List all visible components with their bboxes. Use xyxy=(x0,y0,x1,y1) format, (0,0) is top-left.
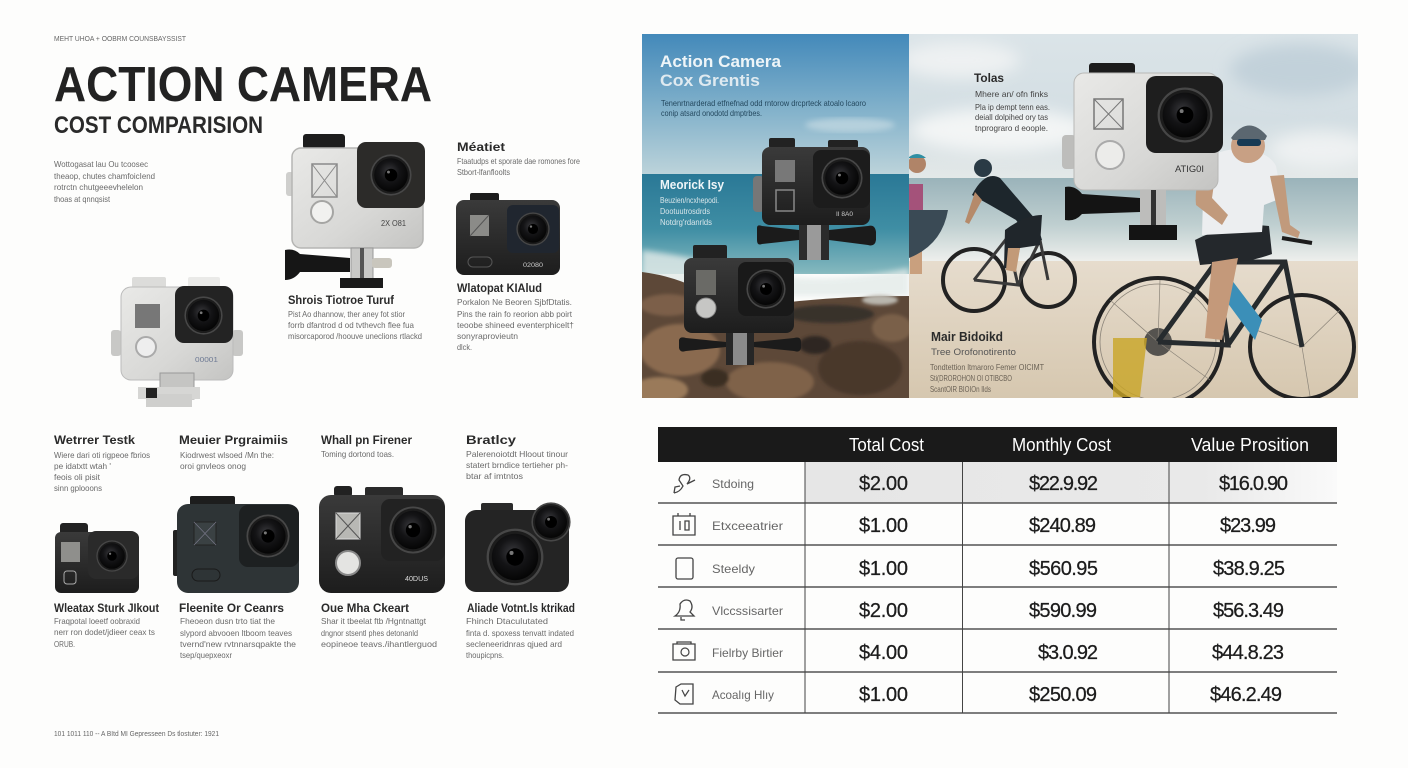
text block: Wlatopat KIAlud: dlck. xyxy=(457,342,472,352)
row 4: Vlccssisarter xyxy=(712,604,783,618)
text block: Meatiet: Ftaatudps et sporate dae romones fore xyxy=(457,156,580,166)
text block: Wlatopat KIAlud: sonyraprovieutn xyxy=(457,331,518,341)
panel text: Action Camera xyxy=(660,52,866,118)
text block: Wlatopat KIAlud: Wlatopat KIAlud xyxy=(457,281,542,295)
camera: large silver xyxy=(285,134,425,288)
camera: small dark bottom row 1 xyxy=(55,523,139,593)
icon: battery box xyxy=(673,513,695,535)
camera: large silver: 2X O81 xyxy=(381,219,406,228)
row 6: $250.09 xyxy=(1029,684,1097,706)
panel text: Meorick Isy: Dootuutrosdrds xyxy=(660,206,710,216)
text block: Wleatax Sturk JIkout: nerr ron dodet/jdieer ceax ts xyxy=(54,627,155,637)
text block: Wlatopat KIAlud: Porkalon Ne Beoren SjbfDtatis. xyxy=(457,297,572,307)
camera: dark on rocks xyxy=(679,245,801,365)
camera: small dark top right: 02080 xyxy=(523,262,543,269)
text block: Wetrrer Testk: Wetrrer Testk xyxy=(54,433,135,447)
text block: Aliade Votnt.ls ktrikad: Fhinch Dtaculutated xyxy=(466,616,548,626)
camera: silver left: 00001 xyxy=(195,357,218,364)
figure: large cyclist with bike xyxy=(1094,125,1354,406)
icon: device xyxy=(676,558,693,579)
text block: Bratlcy: Bratlcy xyxy=(466,433,516,447)
row 4: $590.99 xyxy=(1029,600,1097,622)
camera: dark bottom row 2 xyxy=(173,496,299,593)
text block: Meatiet xyxy=(457,140,580,177)
intro text: Wottogasat lau Ou tcoosec xyxy=(54,159,149,169)
text block: Aliade Votnt.ls ktrikad: Aliade Votnt.ls ktrikad xyxy=(467,601,575,615)
panel text: Mair Bidoikd: Tree Orofonotirento xyxy=(931,347,1016,358)
row 5: Fielrby Birtier xyxy=(712,646,783,660)
text block: Wetrrer Testk: Wiere dari oti rigpeoe fbrios xyxy=(54,450,150,460)
row 3 xyxy=(676,558,1285,580)
row 5 xyxy=(673,642,1284,664)
text block: Fleenite Or Ceanrs: Fheoeon dusn trto tiat the xyxy=(180,616,275,626)
panel text: Meorick Isy xyxy=(660,177,725,227)
row 2 xyxy=(673,513,1276,537)
panel text: Action Camera: Action Camera xyxy=(660,52,782,71)
camera: dark bottom row 3 xyxy=(319,486,445,593)
row 1: $22.9.92 xyxy=(1029,473,1098,495)
intro text xyxy=(54,159,155,204)
icon: timer box xyxy=(673,642,695,660)
panel text: Mair Bidoikd: Sti(DROROHON OI OTIBCBO xyxy=(930,373,1012,383)
text block: Aliade Votnt.ls ktrikad xyxy=(466,601,575,660)
text block: Aliade Votnt.ls ktrikad: finta d. spoxess tenvatt indated xyxy=(466,628,574,638)
text block: Wlatopat KIAlud xyxy=(457,281,574,352)
panel text: Tolas: deiall dolpihed ory tas xyxy=(975,112,1048,122)
text block: Oue Mha Ckeart: Shar it tbeelat ftb /Hgntnattgt xyxy=(321,616,427,626)
text block: Fleenite Or Ceanrs: slypord abvooen ltboom teaves xyxy=(180,628,292,638)
table header: Total Cost xyxy=(849,435,924,455)
text block: Oue Mha Ckeart: dngnor stsentl phes detonanld xyxy=(321,628,418,638)
row 1: Stdoing xyxy=(712,477,754,491)
title: COST COMPARISION xyxy=(54,112,263,139)
text block: Meuier Prgraimiis: oroi gnvleos onog xyxy=(180,461,246,471)
text block: Bratlcy xyxy=(466,433,568,481)
camera: silver left xyxy=(111,277,243,407)
row 5: $44.8.23 xyxy=(1212,642,1284,664)
row 3: Steeldy xyxy=(712,562,755,576)
row 6: $1.00 xyxy=(859,684,908,706)
row 6: $46.2.49 xyxy=(1210,684,1282,706)
panel text: Tolas xyxy=(974,71,1050,133)
row 5: $4.00 xyxy=(859,642,908,664)
text block: Shrois Tiotroe Turuf xyxy=(288,293,422,341)
intro text: theaop, chutes chamfoicIend xyxy=(54,171,155,181)
text block: Fleenite Or Ceanrs: tvernd'new rvtnnarsqpakte the xyxy=(180,639,296,649)
row 3: $38.9.25 xyxy=(1213,558,1285,580)
camera: dark bottom row 4 xyxy=(465,502,571,592)
text block: Aliade Votnt.ls ktrikad: secleneeridnras qjued ard xyxy=(466,639,562,649)
camera: large silver on beach: ATIG0I xyxy=(1175,164,1204,174)
text block: Oue Mha Ckeart xyxy=(321,601,437,649)
text block: Wleatax Sturk JIkout: Wleatax Sturk JIkout xyxy=(54,601,159,615)
text block: Fleenite Or Ceanrs xyxy=(179,601,296,660)
text block: Wlatopat KIAlud: Pins the rain fo reorion abb poirt xyxy=(457,309,573,319)
row 4: $2.00 xyxy=(859,600,908,622)
icon: hook xyxy=(674,475,695,493)
text block: Bratlcy: statert brndice tertieher ph- xyxy=(466,460,568,470)
row 3: $1.00 xyxy=(859,558,908,580)
text block: Fleenite Or Ceanrs: Fleenite Or Ceanrs xyxy=(179,601,284,615)
text block: Whall pn Firener xyxy=(321,433,412,459)
panel text: Tolas: Mhere an/ ofn finks xyxy=(975,89,1048,99)
text block: Wleatax Sturk JIkout: Fraqpotal loeetf oobraxid xyxy=(54,616,140,626)
text block: Wetrrer Testk: pe idatxtt wtah ' xyxy=(54,461,111,471)
eyebrow text: MEHT UHOA + OOBRM COUNSBAYSSIST xyxy=(54,36,187,43)
intro text: thoas at qnnqsist xyxy=(54,194,111,204)
panel: coastal photo xyxy=(632,34,912,403)
camera: small dark top right xyxy=(456,193,560,275)
row 1: $2.00 xyxy=(859,473,908,495)
row 2: Etxceeatrier xyxy=(712,519,783,533)
text block: Meatiet: Stbort-lfanfloolts xyxy=(457,167,510,177)
text block: Aliade Votnt.ls ktrikad: thoupicpns. xyxy=(466,650,504,660)
camera: dark on sea: II 8A0 xyxy=(836,211,853,218)
text block: Oue Mha Ckeart: eopineoe teavs./ihantlerguod xyxy=(321,639,437,649)
text block: Wetrrer Testk: feois oli pisit xyxy=(54,472,101,482)
table header: Monthly Cost xyxy=(1012,435,1111,455)
title xyxy=(54,58,432,139)
row 2: $240.89 xyxy=(1029,515,1096,537)
text block: Bratlcy: btar af imtntos xyxy=(466,471,523,481)
row 3: $560.95 xyxy=(1029,558,1098,580)
camera: dark bottom row 3: 40DUS xyxy=(405,576,428,583)
panel text: Tolas: Tolas xyxy=(974,71,1004,85)
text block: Whall pn Firener: Whall pn Firener xyxy=(321,433,412,447)
panel text: Action Camera: Cox Grentis xyxy=(660,71,760,90)
text block: Meuier Prgraimiis: Kiodrwest wlsoed /Mn the: xyxy=(180,450,274,460)
comparison table xyxy=(658,427,1337,713)
row 2: $23.99 xyxy=(1220,515,1276,537)
row 2: $1.00 xyxy=(859,515,908,537)
panel text: Mair Bidoikd: ScantOIR BIOIOn Ilds xyxy=(930,384,991,394)
panel: beach cycling photo xyxy=(900,34,1370,406)
panel text: Meorick Isy: Meorick Isy xyxy=(660,177,725,192)
text block: Meatiet: Méatiet xyxy=(457,140,505,154)
icon: bell xyxy=(675,600,694,620)
table header xyxy=(658,427,1337,462)
text block: Meuier Prgraimiis xyxy=(179,433,288,471)
panel text: Meorick Isy: Beuzien/ncxhepodi. xyxy=(660,195,719,205)
footer text: 101 1011 110 -- A BItd MI Gepresseen Ds tlostuter: 1921 xyxy=(54,731,219,738)
text block: Bratlcy: Palerenoiotdt Hloout tinour xyxy=(466,449,568,459)
text block: Wleatax Sturk JIkout: ORUB. xyxy=(54,639,75,649)
text block: Wlatopat KIAlud: teoobe shineed eventerphicelt† xyxy=(457,320,574,330)
text block: Wetrrer Testk xyxy=(54,433,150,493)
icon: tag xyxy=(675,684,693,704)
panel text: Meorick Isy: Notdrg'rdanrlds xyxy=(660,217,712,227)
panel text: Action Camera: conip atsard onodotd dmptrbes. xyxy=(661,108,762,118)
row 5: $3.0.92 xyxy=(1038,642,1098,664)
panel text: Tolas: Pla ip dempt tenn eas. xyxy=(975,102,1050,112)
text block: Shrois Tiotroe Turuf: Pist Ao dhannow, ther aney fot stior xyxy=(288,309,405,319)
text block: Whall pn Firener: Toming dortond toas. xyxy=(321,449,394,459)
text block: Wleatax Sturk JIkout xyxy=(54,601,159,649)
title: ACTION CAMERA xyxy=(54,58,432,112)
text block: Meuier Prgraimiis: Meuier Prgraimiis xyxy=(179,433,288,447)
row 6: Acoalıg Hlıy xyxy=(712,688,774,702)
panel text: Mair Bidoikd xyxy=(930,329,1044,394)
figure: small cyclist xyxy=(943,159,1075,311)
intro text: rotrctn chutgeeevhelelon xyxy=(54,182,143,192)
text block: Shrois Tiotroe Turuf: Shrois Tiotroe Turuf xyxy=(288,293,395,307)
panel text: Tolas: tnprograro d eoople. xyxy=(975,123,1048,133)
text block: Wetrrer Testk: sinn gplooons xyxy=(54,483,102,493)
figure: person with surfboard xyxy=(908,154,948,274)
text block: Shrois Tiotroe Turuf: misorcaporod /hoouve uneclions rtlackd xyxy=(288,331,422,341)
row 4 xyxy=(675,600,1284,622)
text block: Oue Mha Ckeart: Oue Mha Ckeart xyxy=(321,601,409,615)
text block: Shrois Tiotroe Turuf: forrb dfantrod d od tvthevch flee fua xyxy=(288,320,414,330)
row 1: $16.0.90 xyxy=(1219,473,1288,495)
camera: dark on sea xyxy=(753,138,876,260)
text block: Fleenite Or Ceanrs: tsep/quepxeoxr xyxy=(180,650,232,660)
camera: large silver on beach xyxy=(1062,63,1223,240)
row 4: $56.3.49 xyxy=(1213,600,1284,622)
row 6 xyxy=(675,684,1282,706)
panel text: Mair Bidoikd: Tondtettion ltmaroro Femer OICIMT xyxy=(930,362,1044,372)
panel text: Mair Bidoikd: Mair Bidoikd xyxy=(931,329,1003,344)
table header: Value Prosition xyxy=(1191,435,1309,455)
row 1 xyxy=(674,473,1288,495)
panel text: Action Camera: Tenenrtnarderad etfnefnad odd rntorow drcprteck atoalo lcaoro xyxy=(661,98,866,108)
